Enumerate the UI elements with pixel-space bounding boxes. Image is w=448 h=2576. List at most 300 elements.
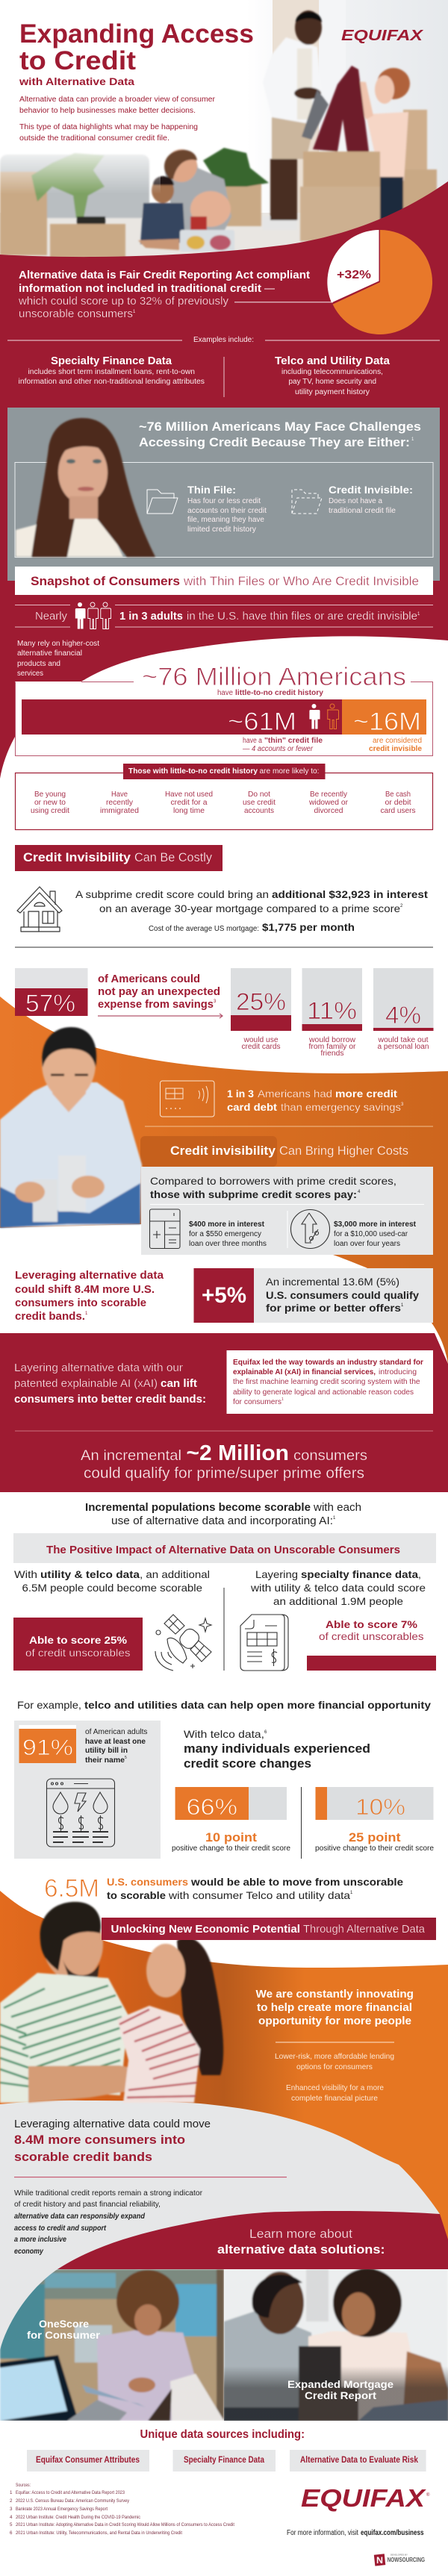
heading: Accessing Credit Because They are Either: — [139, 436, 410, 449]
trait columns — [31, 790, 415, 815]
light grey background wave — [0, 2101, 440, 2359]
alternative data definition text: information not included in traditional credit — [19, 282, 261, 295]
panel: plus five percent: for prime or better offers — [266, 1302, 401, 1314]
traditional credit report text: of credit history and past financial reliability, — [14, 2201, 161, 2209]
callout: xAI standard: for consumers — [233, 1398, 281, 1406]
6.5M statement: with consumer Telco and utility data — [168, 1889, 350, 1901]
specialty finance data — [18, 355, 205, 386]
6.5M statement — [44, 1874, 403, 1903]
icon: house — [17, 887, 62, 932]
xAI lead text — [14, 1362, 206, 1406]
bar: 4 percent: would take out — [377, 1036, 429, 1044]
sources list: 2022 U.S. Census Bureau Data: American Community Survey — [16, 2498, 130, 2504]
utility and telco statement: 6.5M people could become scorable — [22, 1582, 202, 1594]
logo: Equifax bottom: EQUIFAX — [301, 2484, 426, 2512]
thin file text: file, meaning they have — [187, 516, 264, 524]
intro text: This type of data highlights what may be happening — [19, 123, 198, 131]
icon: folder solid — [147, 490, 178, 514]
maroon band: explainable AI — [0, 1333, 448, 1492]
utility and telco statement: utility & telco data — [40, 1568, 140, 1580]
traditional credit report text — [14, 2189, 203, 2256]
telco data statement: credit score changes — [184, 1756, 311, 1771]
credit invisible text: traditional credit file — [329, 507, 396, 515]
bar: 4 percent — [373, 968, 433, 1051]
orange background section — [0, 997, 448, 1364]
intro text — [19, 96, 216, 143]
6.5M statement: 6.5M — [44, 1874, 99, 1903]
one in three adults row: 1 in 3 adults — [119, 610, 183, 623]
heading band: unlocking economic potential — [102, 1918, 436, 1940]
innovating statement: to help create more financial — [257, 2002, 412, 2014]
specialty finance statement: specialty finance data — [301, 1568, 418, 1580]
bar: 11 percent — [302, 968, 362, 1058]
snapshot heading: Snapshot of Consumers — [31, 574, 180, 588]
icon: satellite — [155, 1615, 211, 1671]
credit card debt text: than emergency savings — [281, 1101, 401, 1113]
specialty finance statement: an additional 1.9M people — [273, 1595, 403, 1607]
hero photo: family unpacking moving boxes — [0, 0, 448, 261]
sources list: 2022 Urban Institute: Credit Health During the COVID-19 Pandemic — [16, 2515, 140, 2520]
sources list: 6 — [10, 2530, 13, 2536]
panel: 91 percent utility bill: 91% — [22, 1735, 73, 1760]
bar: 16M invisible — [342, 699, 426, 736]
button: Equifax Consumer Attributes: Equifax Consumer Attributes — [36, 2456, 140, 2465]
heading: higher costs — [170, 1144, 408, 1158]
trait columns: use credit — [243, 798, 276, 807]
title — [19, 19, 254, 87]
bar: 25 percent: credit cards — [242, 1043, 281, 1051]
trait columns: long time — [173, 806, 205, 815]
trait columns: using credit — [31, 806, 69, 815]
credit invisible text: Does not have a — [329, 497, 382, 505]
mortgage interest text: Cost of the average US mortgage: — [149, 925, 259, 933]
examples divider: Examples include: — [193, 336, 254, 344]
leveraging alternative data statement: 1 — [85, 1312, 88, 1316]
panel: subprime costs — [141, 1167, 433, 1255]
bar: 11 percent: would borrow — [308, 1036, 356, 1044]
panel: 91 percent utility bill: their name — [85, 1756, 125, 1765]
telco data statement — [184, 1728, 370, 1771]
icon: document with table — [240, 1615, 288, 1671]
panel: plus five percent: U.S. consumers could qualify — [266, 1289, 419, 1301]
leveraging alternative data statement — [15, 1269, 164, 1323]
bar: 10 percent: 10% — [355, 1794, 405, 1820]
bar: 25 percent — [231, 968, 291, 1051]
panel: plus five percent — [194, 1268, 433, 1323]
bar: 61M thin — [22, 699, 342, 736]
innovating statement: We are constantly innovating — [255, 1989, 414, 2000]
intro text: behavior to help businesses make better decisions. — [19, 107, 196, 115]
thin label: — 4 accounts or fewer — [242, 745, 314, 753]
sources list: 2 — [10, 2498, 13, 2504]
panel: 76 million — [7, 408, 440, 581]
one in three adults row: 1 — [417, 612, 420, 617]
one in three adults row: Nearly — [35, 610, 67, 623]
2 million statement: could qualify for prime/super prime offers — [84, 1465, 364, 1482]
stat card: 25 percent of unscorables: of credit unscorables — [25, 1647, 130, 1659]
more information line — [287, 2529, 424, 2537]
panel: more likely to: Those with little-to-no credit history — [128, 767, 258, 776]
sources list: 4 — [10, 2515, 13, 2520]
icon: percent up arrow — [291, 1209, 330, 1248]
heading: ~76 Million Americans — [142, 663, 406, 691]
subheading: have — [217, 689, 233, 697]
higher-cost note: services — [17, 670, 43, 678]
traditional credit report text: alternative data can responsibly expand — [14, 2212, 146, 2221]
incremental populations text: 1 — [333, 1516, 336, 1521]
trait columns: recently — [106, 798, 134, 807]
8.4M statement: Leveraging alternative data could move — [14, 2118, 211, 2130]
trait columns: accounts — [244, 806, 274, 815]
savings statement and arrow: 3 — [214, 999, 217, 1004]
trait columns: widowed or — [308, 798, 348, 807]
incremental populations text: Incremental populations become scorable — [85, 1501, 311, 1514]
photo: Expanded Mortgage Credit Report: Expanded Mortgage — [287, 2378, 393, 2390]
panel: 91 percent utility bill — [14, 1721, 161, 1859]
telco data statement: many individuals experienced — [184, 1741, 370, 1756]
innovating statement: opportunity for more people — [258, 2015, 411, 2027]
maroon wave: learn more: Learn more about — [249, 2227, 352, 2241]
panel: plus five percent: An incremental 13.6M (5%) — [266, 1276, 399, 1288]
callout: xAI standard: Equifax led the way towards an industry standard for — [233, 1359, 423, 1367]
trait columns: card users — [381, 806, 415, 815]
6.5M statement: 1 — [350, 1891, 353, 1895]
trait columns: Have not used — [165, 790, 213, 799]
callout: xAI standard: introducing — [379, 1368, 417, 1376]
xAI lead text: can lift — [161, 1378, 197, 1390]
stat card: 7 percent of unscorables: Able to score 7% — [326, 1618, 418, 1630]
thin file text: limited credit history — [187, 526, 256, 534]
bar: 61M thin: ~61M — [228, 708, 296, 736]
photo: OneScore for Consumer — [0, 2269, 224, 2421]
telco and utility data — [275, 355, 391, 396]
6.5M statement: would be able to move from unscorable — [190, 1876, 403, 1888]
bar: 11 percent: from family or — [309, 1043, 356, 1051]
utility and telco statement — [14, 1568, 210, 1594]
utility and telco statement: With — [14, 1568, 37, 1580]
stat card: 7 percent of unscorables: of credit unscorables — [319, 1630, 424, 1642]
used car loan text — [334, 1220, 417, 1248]
photo: Expanded Mortgage Credit Report — [224, 2268, 448, 2421]
mortgage interest text: A subprime credit score could bring an — [75, 888, 269, 900]
orange background: economic potential — [0, 1891, 448, 2241]
bar: 10 percent: 25 point — [349, 1830, 401, 1844]
maroon wave: learn more: alternative data solutions: — [217, 2242, 385, 2257]
trait columns: divorced — [314, 806, 343, 815]
bar: 16M invisible: ~16M — [353, 708, 421, 736]
savings statement and arrow: expense from savings — [98, 998, 214, 1011]
savings statement and arrow: of Americans could — [98, 973, 200, 985]
bar: 4 percent: a personal loan — [378, 1043, 429, 1051]
icon: three people — [75, 602, 111, 629]
intro text: outside the traditional consumer credit file. — [19, 134, 169, 143]
portrait photo — [16, 418, 155, 557]
sources list: 2021 Urban Institute: Adopting Alternative Data in Credit Scoring Would Allow Millions of Consumers to Access Credit — [16, 2522, 234, 2527]
bar: 25 percent: would use — [243, 1036, 279, 1044]
mortgage interest text — [75, 888, 428, 933]
maroon background section — [0, 181, 448, 779]
telco and utility data: utility payment history — [295, 388, 370, 396]
panel: plus five percent: +5% — [202, 1283, 246, 1308]
trait columns: Do not — [248, 790, 270, 799]
heading: credit invisibility can be costly — [15, 845, 223, 871]
alternative data definition text: which could score up to 32% of previously — [18, 295, 228, 308]
button: Alternative Data to Evaluate Risk — [290, 2450, 426, 2471]
alternative data definition text: unscorable consumers — [19, 308, 133, 320]
trait columns: or debit — [385, 798, 411, 807]
innovating statement: complete financial picture — [291, 2094, 378, 2103]
invisible label: credit invisible — [369, 745, 422, 753]
2 million statement: consumers — [293, 1447, 367, 1464]
icon: contactless credit card — [160, 1081, 214, 1117]
stat card: 25 percent of unscorables — [13, 1618, 143, 1671]
xAI lead text: Layering alternative data with our — [14, 1362, 183, 1374]
telco example heading: For example, — [17, 1699, 81, 1711]
pie chart: +32% — [327, 230, 432, 334]
icon: calculator — [149, 1209, 180, 1248]
emergency loan text: $400 more in interest — [189, 1220, 265, 1229]
2 million statement — [81, 1441, 367, 1482]
invisible label: are considered — [373, 737, 422, 745]
photo: OneScore for Consumer: for Consumer — [27, 2329, 101, 2341]
trait columns: credit for a — [170, 798, 208, 807]
bar: 11 percent: friends — [321, 1050, 343, 1058]
bar: 4 percent: 4% — [385, 1002, 421, 1029]
bar: 66 percent: 10 point — [205, 1830, 257, 1844]
button: Equifax Consumer Attributes — [27, 2450, 149, 2471]
sources list: 2021 Urban Institute: Utility, Telecommunications, and Rental Data in Underwriting Credit — [16, 2530, 182, 2536]
emergency loan text: for a $550 emergency — [189, 1230, 261, 1238]
credit invisible text: Credit Invisible: — [329, 484, 413, 496]
leveraging alternative data statement: credit bands. — [15, 1310, 85, 1323]
stat card: 25 percent of unscorables: Able to score 25% — [29, 1634, 128, 1646]
traditional credit report text: While traditional credit reports remain a strong indicator — [14, 2189, 203, 2198]
button: Specialty Finance Data: Specialty Finance Data — [184, 2456, 265, 2465]
xAI lead text: patented explainable AI (xAI) — [14, 1378, 158, 1390]
callout: xAI standard — [227, 1350, 433, 1414]
photo: OneScore for Consumer: OneScore — [39, 2318, 89, 2330]
logo: Nowsourcing: NOWSOURCING — [388, 2557, 425, 2563]
snapshot heading — [15, 567, 433, 595]
telco data statement: With telco data, — [184, 1728, 264, 1740]
higher-cost note: alternative financial — [17, 649, 82, 658]
alternative data definition text — [18, 269, 333, 320]
bar: 25 percent: 25% — [236, 988, 286, 1015]
logo: Equifax bottom: ® — [426, 2492, 430, 2498]
stat: 57 percent — [15, 968, 88, 1017]
panel: 76 million americans breakdown — [15, 663, 433, 756]
bar: 66 percent — [172, 1787, 290, 1853]
heading: unique data sources: Unique data sources including: — [140, 2428, 305, 2441]
emergency loan text: loan over three months — [189, 1240, 267, 1248]
specialty finance statement: Layering — [255, 1568, 298, 1580]
6.5M statement: to scorable — [107, 1889, 166, 1901]
bar: 11 percent: 11% — [307, 997, 357, 1024]
xAI lead text: consumers into better credit bands: — [14, 1394, 206, 1406]
heading band: unlocking economic potential: Unlocking New Economic Potential — [111, 1923, 300, 1936]
bar: 66 percent: positive change to their credit score — [172, 1844, 290, 1853]
heading: ~76 Million Americans May Face Challenges — [139, 420, 421, 434]
heading: higher costs: Can Bring Higher Costs — [279, 1144, 408, 1158]
mortgage interest text: $1,775 per month — [262, 921, 355, 933]
logo: Equifax top: EQUIFAX — [341, 28, 424, 44]
traditional credit report text: a more inclusive — [14, 2236, 66, 2244]
innovating statement — [255, 1989, 414, 2103]
savings statement and arrow: not pay an unexpected — [98, 985, 220, 998]
8.4M statement — [14, 2118, 287, 2177]
logo: Nowsourcing: DEVELOPED BY — [391, 2553, 408, 2556]
sources list: Sources: — [16, 2483, 31, 2488]
thin file text: Has four or less credit — [187, 497, 261, 505]
innovating statement: options for consumers — [296, 2062, 373, 2071]
panel: more likely to: are more likely to: — [260, 767, 320, 776]
stat card: 7 percent of unscorables — [307, 1618, 436, 1671]
leveraging alternative data statement: consumers into scorable — [15, 1297, 146, 1309]
panel: subprime costs: 4 — [358, 1190, 361, 1194]
couple photo — [0, 1902, 223, 2103]
trait columns: immigrated — [100, 806, 139, 815]
subheading: little-to-no credit history — [235, 689, 323, 697]
trait columns: Have — [111, 790, 128, 799]
credit card debt text — [227, 1088, 404, 1113]
panel: 91 percent utility bill: utility bill in — [85, 1747, 128, 1755]
specialty finance statement: with utility & telco data could score — [250, 1582, 426, 1594]
title: Expanding Access — [19, 19, 254, 49]
credit card debt text: card debt — [227, 1101, 277, 1113]
specialty finance data: information and other non-traditional lending attributes — [18, 378, 205, 386]
incremental populations text: with each — [313, 1501, 361, 1514]
used car loan text: for a $10,000 used-car — [334, 1230, 408, 1238]
emergency loan text — [189, 1220, 267, 1248]
credit card debt text: more credit — [335, 1088, 397, 1100]
alternative data definition text: — — [264, 282, 275, 295]
callout: xAI standard: the first machine learning credit scoring system with the — [233, 1378, 420, 1386]
thin file text — [187, 484, 267, 534]
title: to Credit — [19, 46, 136, 75]
incremental populations text: use of alternative data and incorporating AI: — [111, 1515, 333, 1527]
invisible label — [369, 737, 422, 753]
specialty finance statement — [250, 1568, 426, 1607]
used car loan text: loan over four years — [334, 1240, 400, 1248]
specialty finance data: Specialty Finance Data — [51, 355, 172, 367]
trait columns: or new to — [34, 798, 66, 807]
callout: xAI standard: 1 — [281, 1397, 284, 1402]
trait columns: Be recently — [310, 790, 348, 799]
sources list: Bankrate 2023 Annual Emergency Savings Report — [16, 2507, 108, 2512]
trait columns: Be cash — [385, 790, 411, 799]
mortgage interest text: on an average 30-year mortgage compared to a prime score — [99, 902, 400, 914]
sources list: 5 — [10, 2522, 13, 2527]
credit card debt text: 1 in 3 — [227, 1088, 254, 1100]
higher-cost note: Many rely on higher-cost — [17, 640, 99, 648]
heading — [139, 420, 421, 449]
logo: Nowsourcing: N — [376, 2555, 383, 2566]
panel: 91 percent utility bill: of American adults — [85, 1728, 148, 1736]
icon: folder dashed — [292, 490, 322, 514]
telco data statement: 6 — [264, 1730, 267, 1735]
utility and telco statement: , an additional — [140, 1568, 210, 1580]
thin file text: accounts on their credit — [187, 507, 267, 515]
sources list: 1 — [10, 2490, 13, 2495]
thin label: have a — [243, 737, 262, 745]
2 million statement: ~2 Million — [187, 1441, 289, 1465]
telco example heading: telco and utilities data can help open more financial opportunity — [84, 1699, 431, 1711]
mortgage interest text: 2 — [400, 904, 403, 908]
intro text: Alternative data can provide a broader view of consumer — [19, 96, 216, 104]
one in three adults row: in the U.S. have thin files or are credit invisible — [187, 610, 417, 623]
heading: credit invisibility can be costly: Credit Invisibility — [23, 850, 131, 864]
higher-cost note — [17, 640, 99, 678]
6.5M statement: U.S. consumers — [107, 1876, 188, 1888]
icon: utility bills window — [46, 1779, 115, 1847]
callout: xAI standard: explainable AI (xAI) in financial services, — [233, 1368, 376, 1376]
traditional credit report text: access to credit and support — [14, 2224, 107, 2233]
8.4M statement: scorable credit bands — [14, 2150, 152, 2164]
more information line: equifax.com/business — [361, 2529, 424, 2537]
thin label — [242, 737, 323, 753]
more information line: For more information, visit — [287, 2529, 358, 2537]
title: with Alternative Data — [19, 76, 135, 87]
man reading bills photo — [0, 1027, 142, 1228]
one in three adults row — [15, 602, 433, 629]
maroon wave: learn more — [57, 2211, 448, 2269]
traditional credit report text: economy — [14, 2248, 43, 2256]
credit invisible text — [329, 484, 413, 515]
leveraging alternative data statement: could shift 8.4M more U.S. — [15, 1283, 155, 1296]
telco and utility data: Telco and Utility Data — [275, 355, 391, 367]
2 million statement: An incremental — [81, 1447, 181, 1464]
trait columns: Be young — [34, 790, 66, 799]
panel: subprime costs: those with subprime credit scores pay: — [150, 1188, 357, 1200]
heading: higher costs: Credit invisibility — [170, 1144, 276, 1158]
heading: 1 — [411, 437, 414, 442]
savings statement and arrow — [98, 973, 223, 1018]
photo: Expanded Mortgage Credit Report: Credit Report — [305, 2389, 376, 2401]
panel: plus five percent: 1 — [401, 1303, 404, 1308]
button: Specialty Finance Data — [173, 2450, 276, 2471]
orange window decoration — [140, 1136, 277, 1167]
stat: 57 percent: 57% — [25, 990, 75, 1017]
credit card debt text: 3 — [401, 1103, 404, 1107]
heading: credit invisibility can be costly: Can Be Costly — [134, 850, 212, 864]
alternative data definition text: 1 — [133, 310, 136, 314]
logo: Nowsourcing — [374, 2553, 425, 2566]
innovating statement: Enhanced visibility for a more — [286, 2083, 384, 2092]
mortgage interest text: additional $32,923 in interest — [272, 888, 428, 900]
thin label: "thin" credit file — [264, 737, 323, 745]
heading band: positive impact — [13, 1533, 436, 1563]
pie chart: +32%: +32% — [337, 269, 371, 281]
button: Alternative Data to Evaluate Risk: Alternative Data to Evaluate Risk — [300, 2456, 419, 2465]
heading band: unlocking economic potential: Through Alternative Data — [303, 1923, 426, 1936]
specialty finance data: includes short term installment loans, rent-to-own — [28, 368, 195, 376]
panel: 91 percent utility bill: 5 — [125, 1756, 127, 1760]
incremental populations text — [85, 1501, 361, 1527]
specialty finance statement: , — [418, 1568, 421, 1580]
alternative data definition text: Alternative data is Fair Credit Reporting Act compliant — [19, 269, 310, 281]
callout: xAI standard: ability to generate logical and actionable reason codes — [233, 1388, 414, 1397]
sources list: Equifax: Access to Credit and Alternative Data Report 2023 — [16, 2490, 125, 2495]
thin file text: Thin File: — [187, 484, 236, 496]
bar: 10 percent — [315, 1787, 434, 1853]
panel: subprime costs: Compared to borrowers with prime credit scores, — [150, 1175, 396, 1187]
sources list: 3 — [10, 2507, 13, 2512]
heading band: positive impact: The Positive Impact of Alternative Data on Unscorable Consumers — [46, 1544, 400, 1556]
8.4M statement: 8.4M more consumers into — [14, 2133, 185, 2147]
credit card debt text: Americans had — [258, 1088, 332, 1100]
higher-cost note: products and — [17, 660, 60, 668]
bar: 10 percent: positive change to their credit score — [315, 1844, 434, 1853]
